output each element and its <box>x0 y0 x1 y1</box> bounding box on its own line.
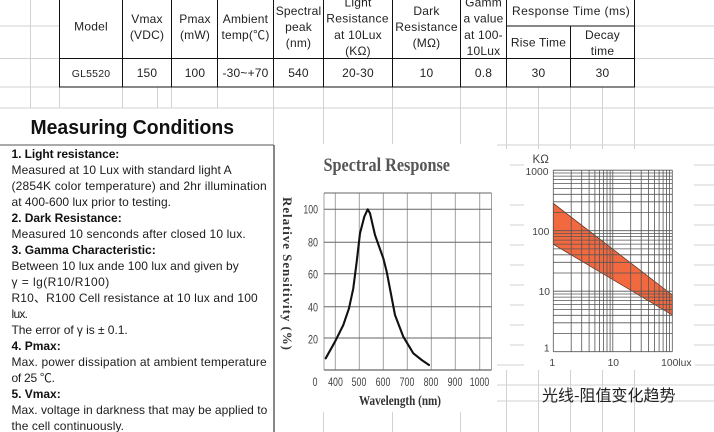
table header labels: Pmax <box>179 12 211 26</box>
condition 3: gamma characteristic: R10、R100 Cell resistance at 10 lux and 100 <box>12 291 258 305</box>
y-axis tick labels: 100 <box>303 202 318 216</box>
table header labels: (nm) <box>286 36 311 50</box>
chart: light vs resistance log-log <box>526 154 692 406</box>
condition 3: gamma characteristic: γ = lg(R10/R100) <box>12 275 109 289</box>
condition 4: Pmax: Max. power dissipation at ambient temperature <box>12 355 267 369</box>
y-axis tick labels: 40 <box>308 300 318 314</box>
heading: Measuring Conditions: Measuring Conditions <box>30 117 234 139</box>
table data row: GL5520: 10 <box>420 66 433 80</box>
table data row: GL5520 <box>72 66 609 80</box>
table data row: GL5520: -30~+70 <box>222 66 269 80</box>
log grid <box>553 170 672 352</box>
table header labels: Dark <box>413 4 440 18</box>
y-axis tick labels <box>303 202 318 346</box>
table header labels: (VDC) <box>130 28 164 42</box>
table header labels: a value <box>463 12 504 26</box>
condition 2: dark resistance: 2. Dark Resistance: <box>12 211 122 225</box>
panel: measuring conditions text <box>0 145 274 432</box>
sensitivity curve <box>326 209 429 365</box>
condition 5: Vmax <box>12 387 268 432</box>
y-axis tick labels: 60 <box>308 268 318 282</box>
x-axis tick labels: 500 <box>352 375 367 389</box>
y-axis title: Relative Sensitivity (%) <box>280 197 295 350</box>
condition 3: gamma characteristic: Between 10 lux ande 100 lux and given by <box>12 259 239 273</box>
x-axis tick labels: 600 <box>376 375 391 389</box>
condition 4: Pmax <box>12 339 267 385</box>
table data row: GL5520: 100 <box>185 66 205 80</box>
x-axis tick labels: 100lux <box>661 358 692 369</box>
y-axis tick labels <box>526 167 550 354</box>
x-axis tick labels: 900 <box>448 375 463 389</box>
table header labels: at 100- <box>464 28 503 42</box>
table header labels: Rise Time <box>511 36 566 50</box>
x-axis tick labels: 10 <box>608 358 619 369</box>
y-axis tick labels: 1 <box>544 344 550 354</box>
table data row: GL5520: 540 <box>288 66 309 80</box>
x-axis title: Wavelength (nm) <box>359 393 441 408</box>
y-axis unit label: KΩ <box>533 154 549 166</box>
x-axis tick labels: 0 <box>312 375 318 389</box>
condition 3: gamma characteristic: The error of γ is ± 0.1. <box>12 323 128 337</box>
condition 4: Pmax: 4. Pmax: <box>12 339 61 353</box>
condition 4: Pmax: of 25 ℃. <box>12 371 55 385</box>
table header labels: Spectral <box>276 4 321 18</box>
x-axis tick labels: 1000 <box>470 375 489 389</box>
table header labels: (MΩ) <box>413 36 440 50</box>
table borders <box>60 0 634 87</box>
table header labels <box>74 0 630 58</box>
table data row: GL5520: GL5520 <box>72 68 110 80</box>
plot grid <box>324 193 492 370</box>
table header labels: time <box>591 44 614 58</box>
table header labels: temp(℃) <box>221 28 270 42</box>
chart caption: 光线-阻值变化趋势 <box>542 382 676 406</box>
resistance band <box>553 203 672 315</box>
y-axis tick labels: 80 <box>308 236 318 250</box>
table header labels: Response Time (ms) <box>512 4 630 18</box>
table header labels: Ambient <box>223 12 269 26</box>
condition 2: dark resistance: Measured 10 senconds after closed 10 lux. <box>12 227 246 241</box>
table header labels: Decay <box>585 28 620 42</box>
condition 1: light resistance <box>12 147 267 209</box>
condition 1: light resistance: (2854K color temperature) and 2hr illumination <box>12 179 267 193</box>
y-axis tick labels: 10 <box>539 287 550 298</box>
table header labels: Model <box>74 20 108 34</box>
condition 3: gamma characteristic: lux. <box>12 307 28 321</box>
table header labels: Resistance <box>395 20 458 34</box>
y-axis tick labels: 1000 <box>526 167 549 178</box>
table data row: GL5520: 0.8 <box>475 66 492 80</box>
table data row: GL5520: 30 <box>532 66 545 80</box>
x-axis tick labels: 1 <box>549 358 555 369</box>
x-axis tick labels: 800 <box>424 375 439 389</box>
specifications table <box>60 0 634 87</box>
table header labels: Resistance <box>326 12 389 26</box>
condition 1: light resistance: 1. Light resistance: <box>12 147 119 161</box>
table header labels: (KΩ) <box>345 44 371 58</box>
table header labels: 10Lux <box>467 44 500 58</box>
condition 3: gamma characteristic: 3. Gamma Characteristic: <box>12 243 156 257</box>
condition 1: light resistance: Measured at 10 Lux with standard light A <box>12 163 232 177</box>
x-axis tick labels: 400 <box>328 375 343 389</box>
table header labels: peak <box>285 20 313 34</box>
table header labels: Vmax <box>131 12 163 26</box>
condition 5: Vmax: 5. Vmax: <box>12 387 61 401</box>
condition 1: light resistance: at 400-600 lux prior to testing. <box>12 195 171 209</box>
x-axis tick labels: 700 <box>400 375 415 389</box>
x-axis tick labels <box>312 375 489 389</box>
table data row: GL5520: 150 <box>137 66 157 80</box>
table data row: GL5520: 20-30 <box>342 66 374 80</box>
chart title: Spectral Response <box>324 155 450 176</box>
x-axis tick labels <box>549 358 692 369</box>
table data row: GL5520: 30 <box>596 66 609 80</box>
y-axis tick labels: 20 <box>308 332 318 346</box>
condition 5: Vmax: Max. voltage in darkness that may be applied to <box>12 403 268 417</box>
y-axis tick labels: 100 <box>532 227 550 238</box>
table header labels: (mW) <box>180 28 210 42</box>
chart: spectral response <box>280 155 492 408</box>
condition 3: gamma characteristic <box>12 243 258 337</box>
table header labels: at 10Lux <box>334 28 382 42</box>
condition 2: dark resistance <box>12 211 246 241</box>
